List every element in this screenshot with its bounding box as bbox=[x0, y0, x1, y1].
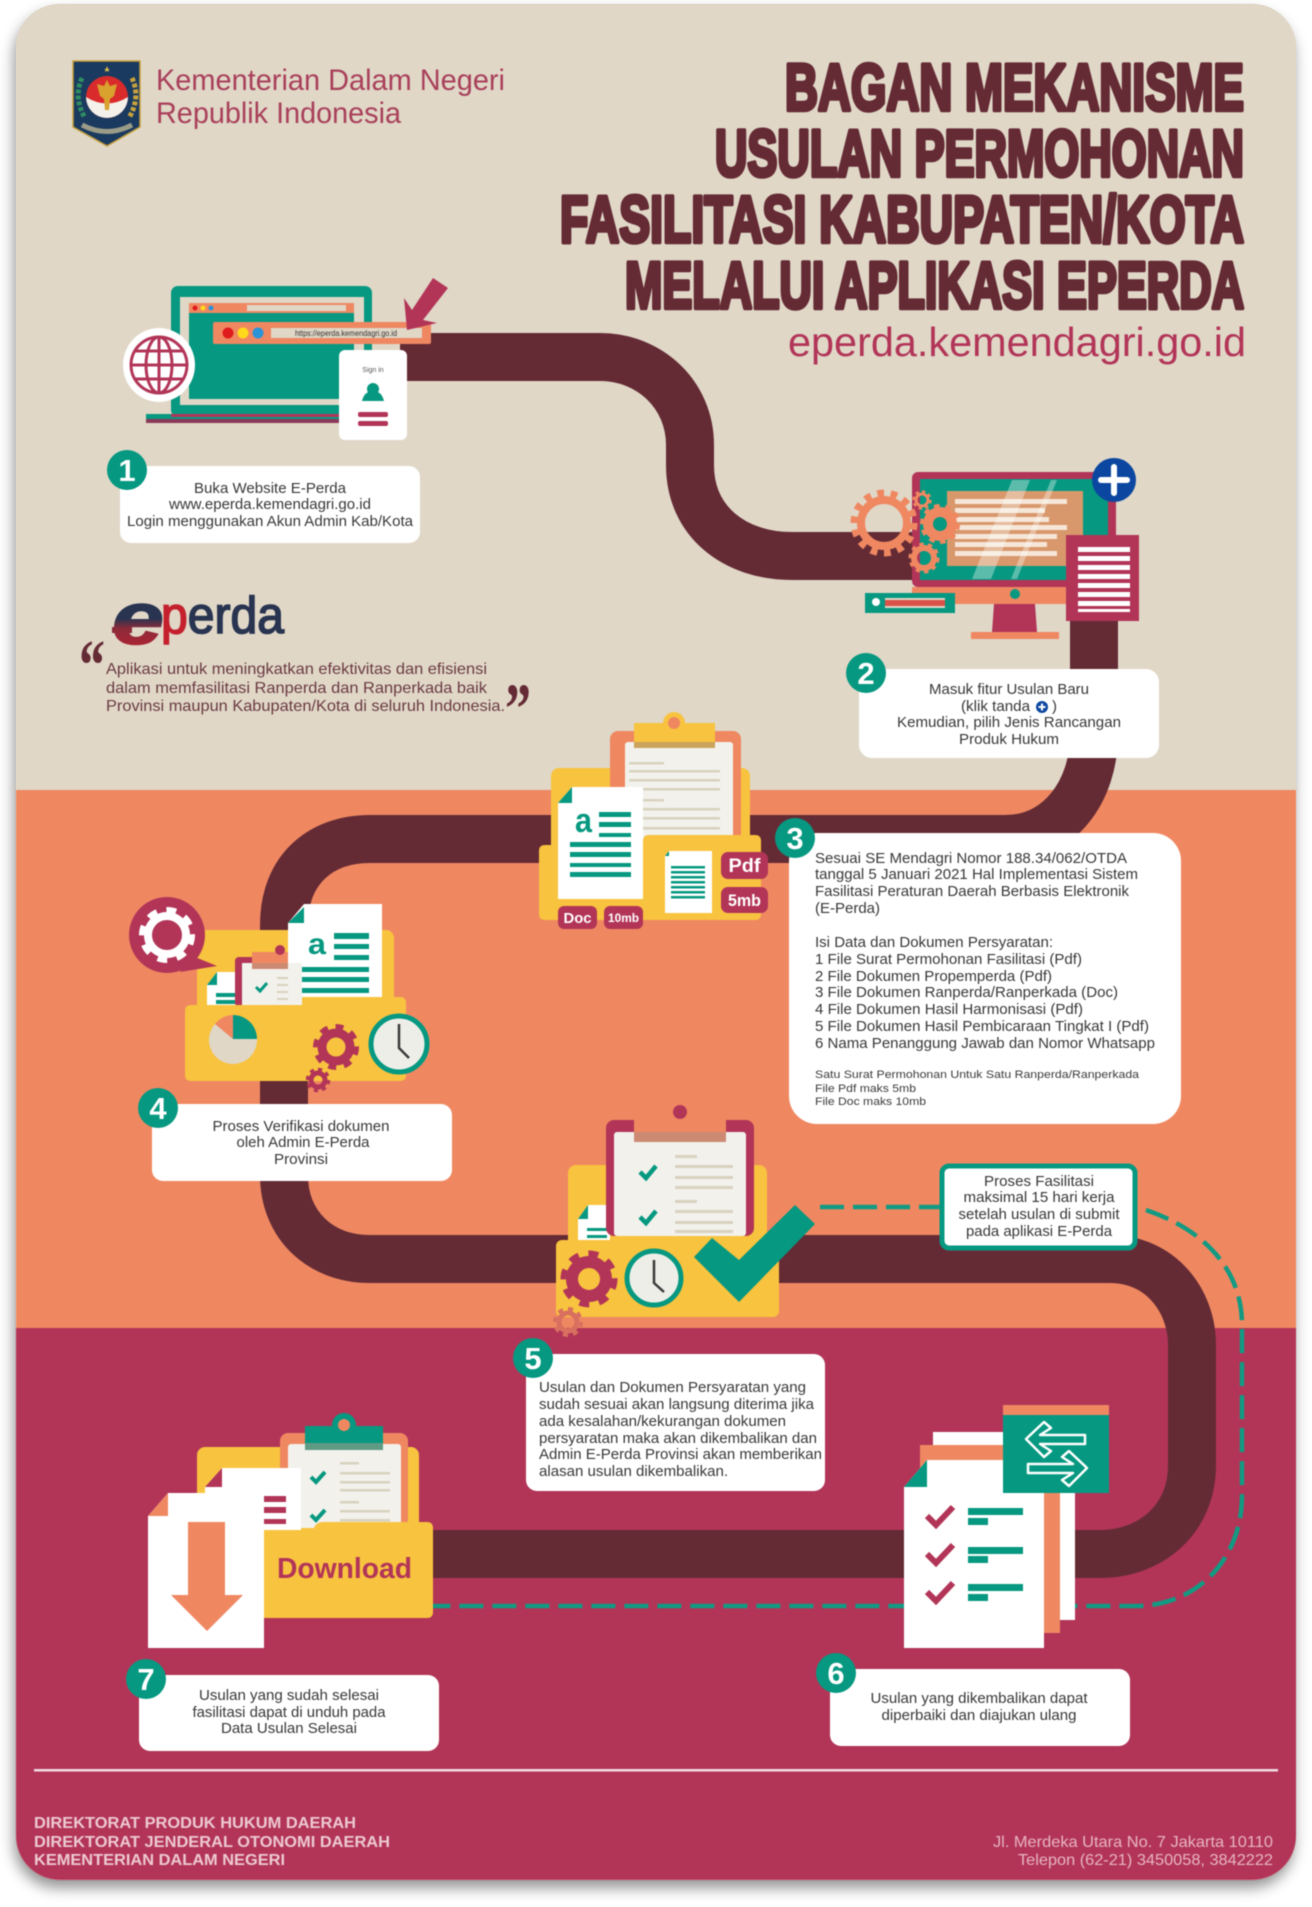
sign-in card: Sign in bbox=[362, 367, 384, 374]
clipboard bbox=[280, 1413, 408, 1528]
step 6 box: diperbaiki dan diajukan ulang bbox=[882, 1707, 1076, 1724]
footer right bbox=[993, 1834, 1273, 1869]
footer left: DIREKTORAT PRODUK HUKUM DAERAH bbox=[34, 1815, 356, 1832]
ministry name bbox=[156, 64, 505, 130]
facilitation callout: setelah usulan di submit bbox=[958, 1206, 1120, 1223]
gear small bbox=[308, 1070, 328, 1090]
step 4 box bbox=[138, 1088, 452, 1181]
check list bbox=[927, 1507, 1023, 1601]
step 2 box: ) bbox=[1052, 698, 1057, 715]
doc pdf bbox=[665, 851, 712, 913]
step 3 box: 1 File Surat Permohonan Fasilitasi (Pdf) bbox=[815, 951, 1082, 968]
doc badge: Doc bbox=[564, 910, 592, 927]
footer right: Jl. Merdeka Utara No. 7 Jakarta 10110 bbox=[993, 1834, 1273, 1851]
quote text: Provinsi maupun Kabupaten/Kota di seluruh Indonesia. bbox=[106, 698, 505, 715]
step 5 box: 5 bbox=[524, 1341, 542, 1376]
gear large bbox=[564, 1254, 614, 1304]
step 5 box bbox=[513, 1338, 825, 1491]
step 1 box: Buka Website E-Perda bbox=[194, 480, 347, 497]
big check mark bbox=[694, 1205, 815, 1302]
step 5 box: sudah sesuai akan langsung diterima jika bbox=[539, 1396, 815, 1413]
illustration: documents folder step 3 bbox=[539, 712, 768, 929]
small doc bbox=[578, 1205, 610, 1241]
step 1 box: Login menggunakan Akun Admin Kab/Kota bbox=[127, 513, 414, 530]
step 3 box: 5 File Dokumen Hasil Pembicaraan Tingkat I (Pdf) bbox=[815, 1018, 1149, 1035]
eperda logo: e bbox=[112, 577, 164, 660]
5mb badge: 5mb bbox=[728, 891, 761, 910]
step 5 box: alasan usulan dikembalikan. bbox=[539, 1463, 728, 1480]
illustration: laptop with login bbox=[123, 278, 448, 440]
step 4 box: 4 bbox=[149, 1091, 167, 1126]
illustration: download folder step 7 bbox=[148, 1413, 433, 1648]
step 6 box: Usulan yang dikembalikan dapat bbox=[870, 1690, 1088, 1707]
step 1 box: www.eperda.kemendagri.go.id bbox=[168, 496, 371, 513]
step 3 box: (E-Perda) bbox=[815, 900, 880, 917]
quote text: dalam memfasilitasi Ranperda dan Ranperkada baik bbox=[106, 680, 488, 697]
facilitation callout: Proses Fasilitasi bbox=[984, 1173, 1094, 1190]
pdf badge bbox=[721, 852, 768, 879]
step 3 box: 3 bbox=[786, 821, 804, 856]
step 7 box: Usulan yang sudah selesai bbox=[199, 1687, 379, 1704]
sign-in card bbox=[339, 350, 407, 440]
globe icon bbox=[123, 328, 195, 402]
small status bar bbox=[865, 593, 955, 613]
step 5 box: persyaratan maka akan dikembalikan dan bbox=[539, 1430, 817, 1447]
pdf badge: Pdf bbox=[728, 856, 761, 877]
step 3 box: File Pdf maks 5mb bbox=[815, 1083, 916, 1095]
quote text: Aplikasi untuk meningkatkan efektivitas dan efisiensi bbox=[106, 661, 487, 678]
url bar: https://eperda.kemendagri.go.id bbox=[295, 329, 397, 338]
ministry name: Republik Indonesia bbox=[156, 97, 401, 130]
step 2 box: Kemudian, pilih Jenis Rancangan bbox=[897, 714, 1121, 731]
dashed return line bbox=[433, 1207, 1242, 1606]
faded gear bbox=[555, 1309, 581, 1335]
step 3 box: 6 Nama Penanggung Jawab dan Nomor Whatsapp bbox=[815, 1035, 1155, 1052]
website url: eperda.kemendagri.go.id bbox=[788, 319, 1246, 365]
footer left bbox=[34, 1815, 390, 1869]
back page bbox=[205, 1468, 301, 1530]
step 2 box: (klik tanda bbox=[961, 698, 1031, 715]
step 3 box: Sesuai SE Mendagri Nomor 188.34/062/OTDA bbox=[815, 850, 1127, 867]
footer left: DIREKTORAT JENDERAL OTONOMI DAERAH bbox=[34, 1834, 390, 1851]
step 5 box: Admin E-Perda Provinsi akan memberikan bbox=[539, 1446, 822, 1463]
gear large bbox=[316, 1027, 356, 1067]
step 4 box: oleh Admin E-Perda bbox=[236, 1134, 370, 1151]
step 7 box bbox=[126, 1659, 439, 1751]
doc a: a bbox=[308, 928, 326, 961]
step 4 box: Provinsi bbox=[274, 1151, 328, 1168]
clock bbox=[371, 1016, 427, 1072]
footer right: Telepon (62-21) 3450058, 3842222 bbox=[1018, 1852, 1273, 1869]
quote text: ” bbox=[505, 669, 531, 749]
illustration: facilitation folder step 5 bbox=[555, 1105, 815, 1335]
step 5 box: Usulan dan Dokumen Persyaratan yang bbox=[539, 1379, 806, 1396]
step 7 box: Data Usulan Selesai bbox=[221, 1720, 357, 1737]
10mb badge bbox=[604, 906, 643, 929]
small doc bbox=[207, 972, 240, 1006]
step 3 box: 2 File Dokumen Propemperda (Pdf) bbox=[815, 968, 1052, 985]
clipboard bbox=[606, 1105, 754, 1236]
5mb badge bbox=[721, 887, 768, 913]
illustration: verification folder step 4 bbox=[129, 897, 427, 1090]
ministry name: Kementerian Dalam Negeri bbox=[156, 64, 505, 97]
facilitation callout: pada aplikasi E-Perda bbox=[966, 1223, 1113, 1240]
step 3 box: 4 File Dokumen Hasil Harmonisasi (Pdf) bbox=[815, 1001, 1083, 1018]
download label: Download bbox=[277, 1553, 412, 1585]
pie chart bbox=[209, 1015, 257, 1064]
doc a bbox=[288, 904, 382, 1005]
step 1 box bbox=[107, 450, 420, 543]
step 2 box: Produk Hukum bbox=[959, 731, 1059, 748]
footer left: KEMENTERIAN DALAM NEGERI bbox=[34, 1852, 285, 1869]
facilitation callout bbox=[942, 1166, 1135, 1248]
step 2 box: 2 bbox=[857, 656, 875, 691]
front page with arrow bbox=[148, 1493, 264, 1648]
step 2 box bbox=[846, 653, 1159, 758]
step 3 box: 3 File Dokumen Ranperda/Ranperkada (Doc) bbox=[815, 984, 1118, 1001]
step 3 box: tanggal 5 Januari 2021 Hal Implementasi Sistem bbox=[815, 866, 1138, 883]
ministry logo bbox=[73, 61, 140, 146]
pointer arrow bbox=[404, 278, 448, 330]
step 3 box: Satu Surat Permohonan Untuk Satu Ranperda/Ranperkada bbox=[815, 1069, 1140, 1081]
exchange panel bbox=[1003, 1405, 1109, 1493]
gears bbox=[854, 492, 958, 572]
illustration: returned documents step 6 bbox=[904, 1405, 1109, 1648]
flow path bbox=[284, 357, 1192, 1554]
step 3 box: Fasilitasi Peraturan Daerah Berbasis Elektronik bbox=[815, 883, 1129, 900]
step 5 box: ada kesalahan/kekurangan dokumen bbox=[539, 1413, 786, 1430]
step 7 box: fasilitasi dapat di unduh pada bbox=[192, 1704, 386, 1721]
doc a bbox=[558, 787, 643, 899]
step 1 box: 1 bbox=[118, 453, 136, 488]
title bbox=[560, 50, 1244, 322]
eperda logo: perda bbox=[161, 587, 284, 645]
10mb badge: 10mb bbox=[608, 911, 639, 925]
document bbox=[1066, 535, 1139, 621]
step 3 box: File Doc maks 10mb bbox=[815, 1096, 926, 1108]
step 3 box: Isi Data dan Dokumen Persyaratan: bbox=[815, 934, 1053, 951]
doc a: a bbox=[575, 802, 593, 840]
quote text: “ bbox=[79, 625, 105, 705]
gear speech bubble bbox=[129, 897, 217, 973]
step 4 box: Proses Verifikasi dokumen bbox=[212, 1118, 390, 1135]
url bar bbox=[213, 322, 431, 344]
step 7 box: 7 bbox=[137, 1662, 155, 1697]
step 3 box bbox=[775, 818, 1181, 1124]
illustration: monitor with gears bbox=[854, 458, 1139, 639]
clock bbox=[627, 1251, 681, 1305]
facilitation callout: maksimal 15 hari kerja bbox=[964, 1189, 1115, 1206]
doc badge bbox=[558, 906, 597, 929]
quote text bbox=[79, 625, 531, 749]
step 6 box bbox=[816, 1653, 1130, 1746]
step 6 box: 6 bbox=[827, 1656, 845, 1691]
small clipboard bbox=[235, 945, 302, 1007]
eperda logo bbox=[112, 577, 284, 660]
step 2 box: Masuk fitur Usulan Baru bbox=[929, 681, 1089, 698]
plus icon bbox=[1092, 458, 1136, 502]
